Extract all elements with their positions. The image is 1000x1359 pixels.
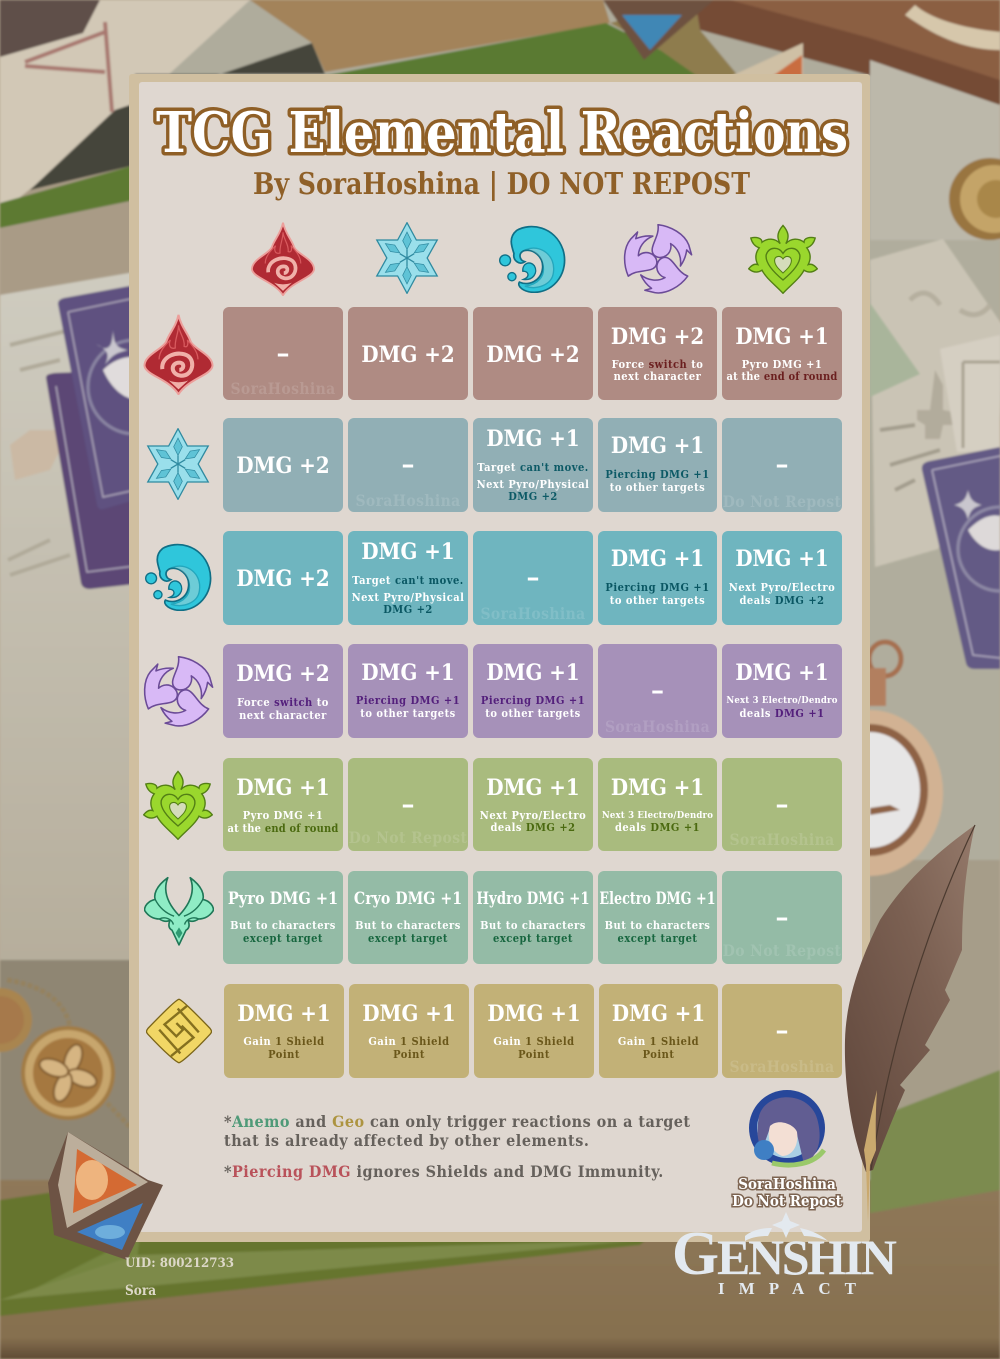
cell: cryo electro: Piercing DMG +1 (605, 468, 710, 481)
note: piercing damage: *Piercing DMG ignores Shields and DMG Immunity. (224, 1162, 664, 1181)
cell: anemo dendro: Do Not Repost (723, 941, 841, 960)
cell: geo hydro (474, 984, 594, 1078)
cell: anemo hydro: Hydro DMG +1 (476, 889, 590, 908)
cell: hydro cryo (348, 531, 468, 625)
cell: anemo pyro: except target (243, 932, 323, 945)
cell: cryo pyro: DMG +2 (236, 453, 330, 479)
cell: pyro dendro: at the end of round (726, 370, 838, 383)
left paper (0, 272, 135, 960)
reaction table: pyro row (223, 307, 842, 400)
cell: dendro dendro: SoraHoshina (729, 830, 835, 849)
cell: electro hydro (473, 644, 593, 738)
cell: electro hydro: DMG +1 (486, 660, 580, 686)
cell: cryo hydro: DMG +2 (508, 490, 558, 503)
cell: pyro dendro (722, 307, 842, 400)
cell: hydro pyro (223, 531, 343, 625)
cell: cryo pyro (223, 418, 343, 512)
note: anemo and geo: that is already affected by other elements. (224, 1131, 589, 1150)
left purple cards (46, 285, 182, 589)
cell: hydro hydro (473, 531, 593, 625)
cell: electro pyro: Force switch to (237, 696, 329, 709)
cell: anemo pyro: Pyro DMG +1 (228, 889, 338, 908)
row icon: dendro (144, 771, 212, 839)
cell: geo pyro: DMG +1 (237, 1001, 331, 1027)
cell: anemo pyro: But to characters (230, 919, 336, 932)
cell: anemo hydro: except target (493, 932, 573, 945)
cell: geo dendro: SoraHoshina (729, 1057, 835, 1076)
cell: pyro electro (598, 307, 717, 400)
reaction table: hydro row (223, 531, 842, 625)
cell: hydro cryo: DMG +1 (361, 539, 455, 565)
top-left scroll and book (0, 0, 140, 300)
cell: cryo hydro: Target can't move. (477, 461, 589, 474)
cell: hydro dendro (722, 531, 842, 625)
cell: cryo cryo: SoraHoshina (355, 491, 461, 510)
cell: anemo cryo: Cryo DMG +1 (354, 889, 462, 908)
cell: electro cryo: to other targets (360, 707, 456, 720)
cell: electro dendro (722, 644, 842, 738)
text: Do Not Repost (732, 1192, 842, 1210)
cell: cryo electro: DMG +1 (611, 433, 704, 459)
cell: electro cryo (348, 644, 468, 738)
row icon: electro (131, 657, 213, 738)
cell: electro hydro: Piercing DMG +1 (481, 694, 585, 707)
row icon: cryo (148, 429, 208, 499)
cell: hydro electro: DMG +1 (611, 546, 704, 572)
cell: hydro cryo: Next Pyro/Physical (352, 591, 464, 604)
cell: hydro dendro: Next Pyro/Electro (729, 581, 835, 594)
cell: hydro dendro: DMG +1 (735, 546, 829, 572)
cell: geo pyro: Gain 1 Shield (243, 1035, 325, 1048)
cell: electro pyro (223, 644, 343, 738)
cell: electro electro (598, 644, 717, 738)
reaction table: cryo row (223, 418, 842, 512)
cell: dendro pyro (223, 758, 343, 851)
cell: hydro pyro: DMG +2 (236, 566, 330, 592)
cell: anemo pyro (223, 871, 343, 964)
cell: anemo electro: except target (618, 932, 697, 945)
cell: hydro dendro: deals DMG +2 (739, 594, 825, 607)
cell: electro dendro: DMG +1 (735, 660, 829, 686)
cell: electro electro: - (651, 678, 664, 704)
cell: cryo cryo: - (401, 452, 415, 478)
cell: dendro pyro: DMG +1 (236, 775, 330, 801)
coin top right (949, 158, 1000, 240)
cell: dendro hydro: DMG +1 (486, 775, 580, 801)
cell: hydro cryo: DMG +2 (383, 603, 433, 616)
cell: cryo dendro (722, 418, 842, 512)
cell: geo dendro: - (775, 1018, 789, 1044)
cell: geo electro: Point (643, 1048, 674, 1061)
Genshin Impact logo: IMPACT (718, 1279, 857, 1298)
cell: geo cryo (349, 984, 469, 1078)
cell: geo cryo: Gain 1 Shield (368, 1035, 450, 1048)
floor lower band (0, 1180, 1000, 1359)
cell: dendro electro (598, 758, 717, 851)
cell: geo cryo: DMG +1 (362, 1001, 456, 1027)
cell: hydro electro: to other targets (610, 594, 705, 607)
row icon: geo (146, 999, 212, 1063)
gem top (603, 0, 714, 60)
cell: dendro electro: Next 3 Electro/Dendro (602, 810, 713, 821)
row icon: pyro (144, 315, 213, 394)
cell: pyro electro: Force switch to (612, 358, 703, 371)
title: TCG Elemental Reactions (156, 100, 848, 166)
cell: hydro hydro: SoraHoshina (480, 604, 586, 623)
cell: electro cryo: DMG +1 (361, 660, 455, 686)
cell: anemo cryo: But to characters (355, 919, 461, 932)
cell: geo hydro: Point (518, 1048, 550, 1061)
cell: hydro electro (598, 531, 717, 625)
pocket watch (797, 642, 943, 876)
subtitle: By SoraHoshina | DO NOT REPOST (253, 167, 750, 202)
column icon: pyro (252, 223, 314, 295)
Genshin Impact logo: ENSHIN (717, 1229, 897, 1285)
cell: geo electro: DMG +1 (612, 1001, 705, 1027)
cell: cryo hydro: Next Pyro/Physical (477, 478, 589, 491)
cell: geo hydro: DMG +1 (487, 1001, 581, 1027)
right purple card (922, 447, 1000, 669)
cell: pyro dendro: Pyro DMG +1 (742, 358, 822, 371)
reaction table: dendro row (223, 758, 842, 851)
cell: geo pyro (224, 984, 344, 1078)
cell: dendro cryo: Do Not Repost (349, 828, 467, 847)
cell: electro dendro: deals DMG +1 (739, 707, 825, 720)
cell: dendro hydro: deals DMG +2 (490, 821, 576, 834)
cell: pyro electro: next character (614, 370, 701, 383)
cell: geo hydro: Gain 1 Shield (493, 1035, 575, 1048)
column icon: electro (611, 225, 692, 305)
reaction table: anemo row (223, 871, 842, 964)
cell: pyro hydro: DMG +2 (486, 342, 580, 368)
cell: cryo hydro: DMG +1 (486, 426, 580, 452)
cell: cryo dendro: - (775, 452, 789, 478)
cell: anemo cryo (348, 871, 468, 964)
cell: geo dendro (722, 984, 842, 1078)
cell: hydro electro: Piercing DMG +1 (605, 581, 710, 594)
cell: anemo electro: Electro DMG +1 (599, 889, 716, 908)
cell: dendro hydro (473, 758, 593, 851)
cell: electro cryo: Piercing DMG +1 (356, 694, 460, 707)
Genshin Impact logo: G (672, 1220, 719, 1288)
cell: dendro dendro: - (775, 792, 789, 818)
cell: dendro pyro: at the end of round (227, 822, 339, 835)
text: SoraHoshina (738, 1175, 836, 1193)
author signature (731, 1175, 844, 1210)
cell: anemo dendro (722, 871, 842, 964)
column icon: dendro (749, 225, 817, 293)
cell: anemo dendro: - (775, 905, 789, 931)
cell: dendro cryo (348, 758, 468, 851)
cell: dendro electro: DMG +1 (611, 775, 704, 801)
cell: dendro electro: deals DMG +1 (615, 821, 700, 834)
cell: geo pyro: Point (268, 1048, 300, 1061)
column icon: hydro (500, 227, 565, 292)
cell: electro hydro: to other targets (485, 707, 581, 720)
cell: dendro dendro (722, 758, 842, 851)
player name: Sora (125, 1283, 156, 1299)
cell: dendro pyro: Pyro DMG +1 (243, 809, 323, 822)
cell: pyro cryo (348, 307, 468, 400)
cell: cryo cryo (348, 418, 468, 512)
note: anemo and geo (224, 1112, 691, 1150)
cell: geo cryo: Point (393, 1048, 425, 1061)
wooden box (695, 0, 1000, 110)
cell: geo electro: Gain 1 Shield (618, 1035, 699, 1048)
cell: pyro dendro: DMG +1 (735, 324, 829, 350)
cell: electro dendro: Next 3 Electro/Dendro (726, 695, 838, 706)
cell: pyro electro: DMG +2 (611, 324, 704, 350)
cell: pyro pyro: SoraHoshina (230, 379, 336, 398)
reaction table: geo row (224, 984, 842, 1078)
cell: cryo dendro: Do Not Repost (723, 492, 841, 511)
cell: pyro pyro (223, 307, 343, 400)
row icon: hydro (146, 545, 211, 610)
cell: anemo hydro (473, 871, 593, 964)
right side floor (870, 240, 1000, 860)
cell: electro pyro: next character (239, 709, 327, 722)
column icon: cryo (377, 223, 437, 293)
cell: cryo electro (598, 418, 717, 512)
cell: anemo hydro: But to characters (480, 919, 586, 932)
cell: dendro cryo: - (401, 792, 415, 818)
cell: anemo electro (598, 871, 717, 964)
cell: anemo electro: But to characters (605, 919, 710, 932)
cell: pyro hydro (473, 307, 593, 400)
cell: dendro hydro: Next Pyro/Electro (480, 809, 586, 822)
row icon: anemo (145, 878, 213, 945)
cell: electro electro: SoraHoshina (605, 717, 710, 736)
UID text: UID: 800212733 (125, 1256, 234, 1271)
cell: anemo cryo: except target (368, 932, 448, 945)
lower left floor, coins and chain (0, 960, 135, 1200)
reaction table: electro row (223, 644, 842, 738)
cell: electro pyro: DMG +2 (236, 661, 330, 687)
cell: pyro cryo: DMG +2 (361, 342, 455, 368)
note: anemo and geo: *Anemo and Geo can only trigger reactions on a target (224, 1112, 691, 1131)
cell: hydro cryo: Target can't move. (352, 574, 464, 587)
cell: hydro hydro: - (526, 565, 540, 591)
cell: cryo hydro (473, 418, 593, 512)
cell: geo electro (599, 984, 718, 1078)
cell: cryo electro: to other targets (610, 481, 705, 494)
cell: pyro pyro: - (276, 341, 290, 367)
